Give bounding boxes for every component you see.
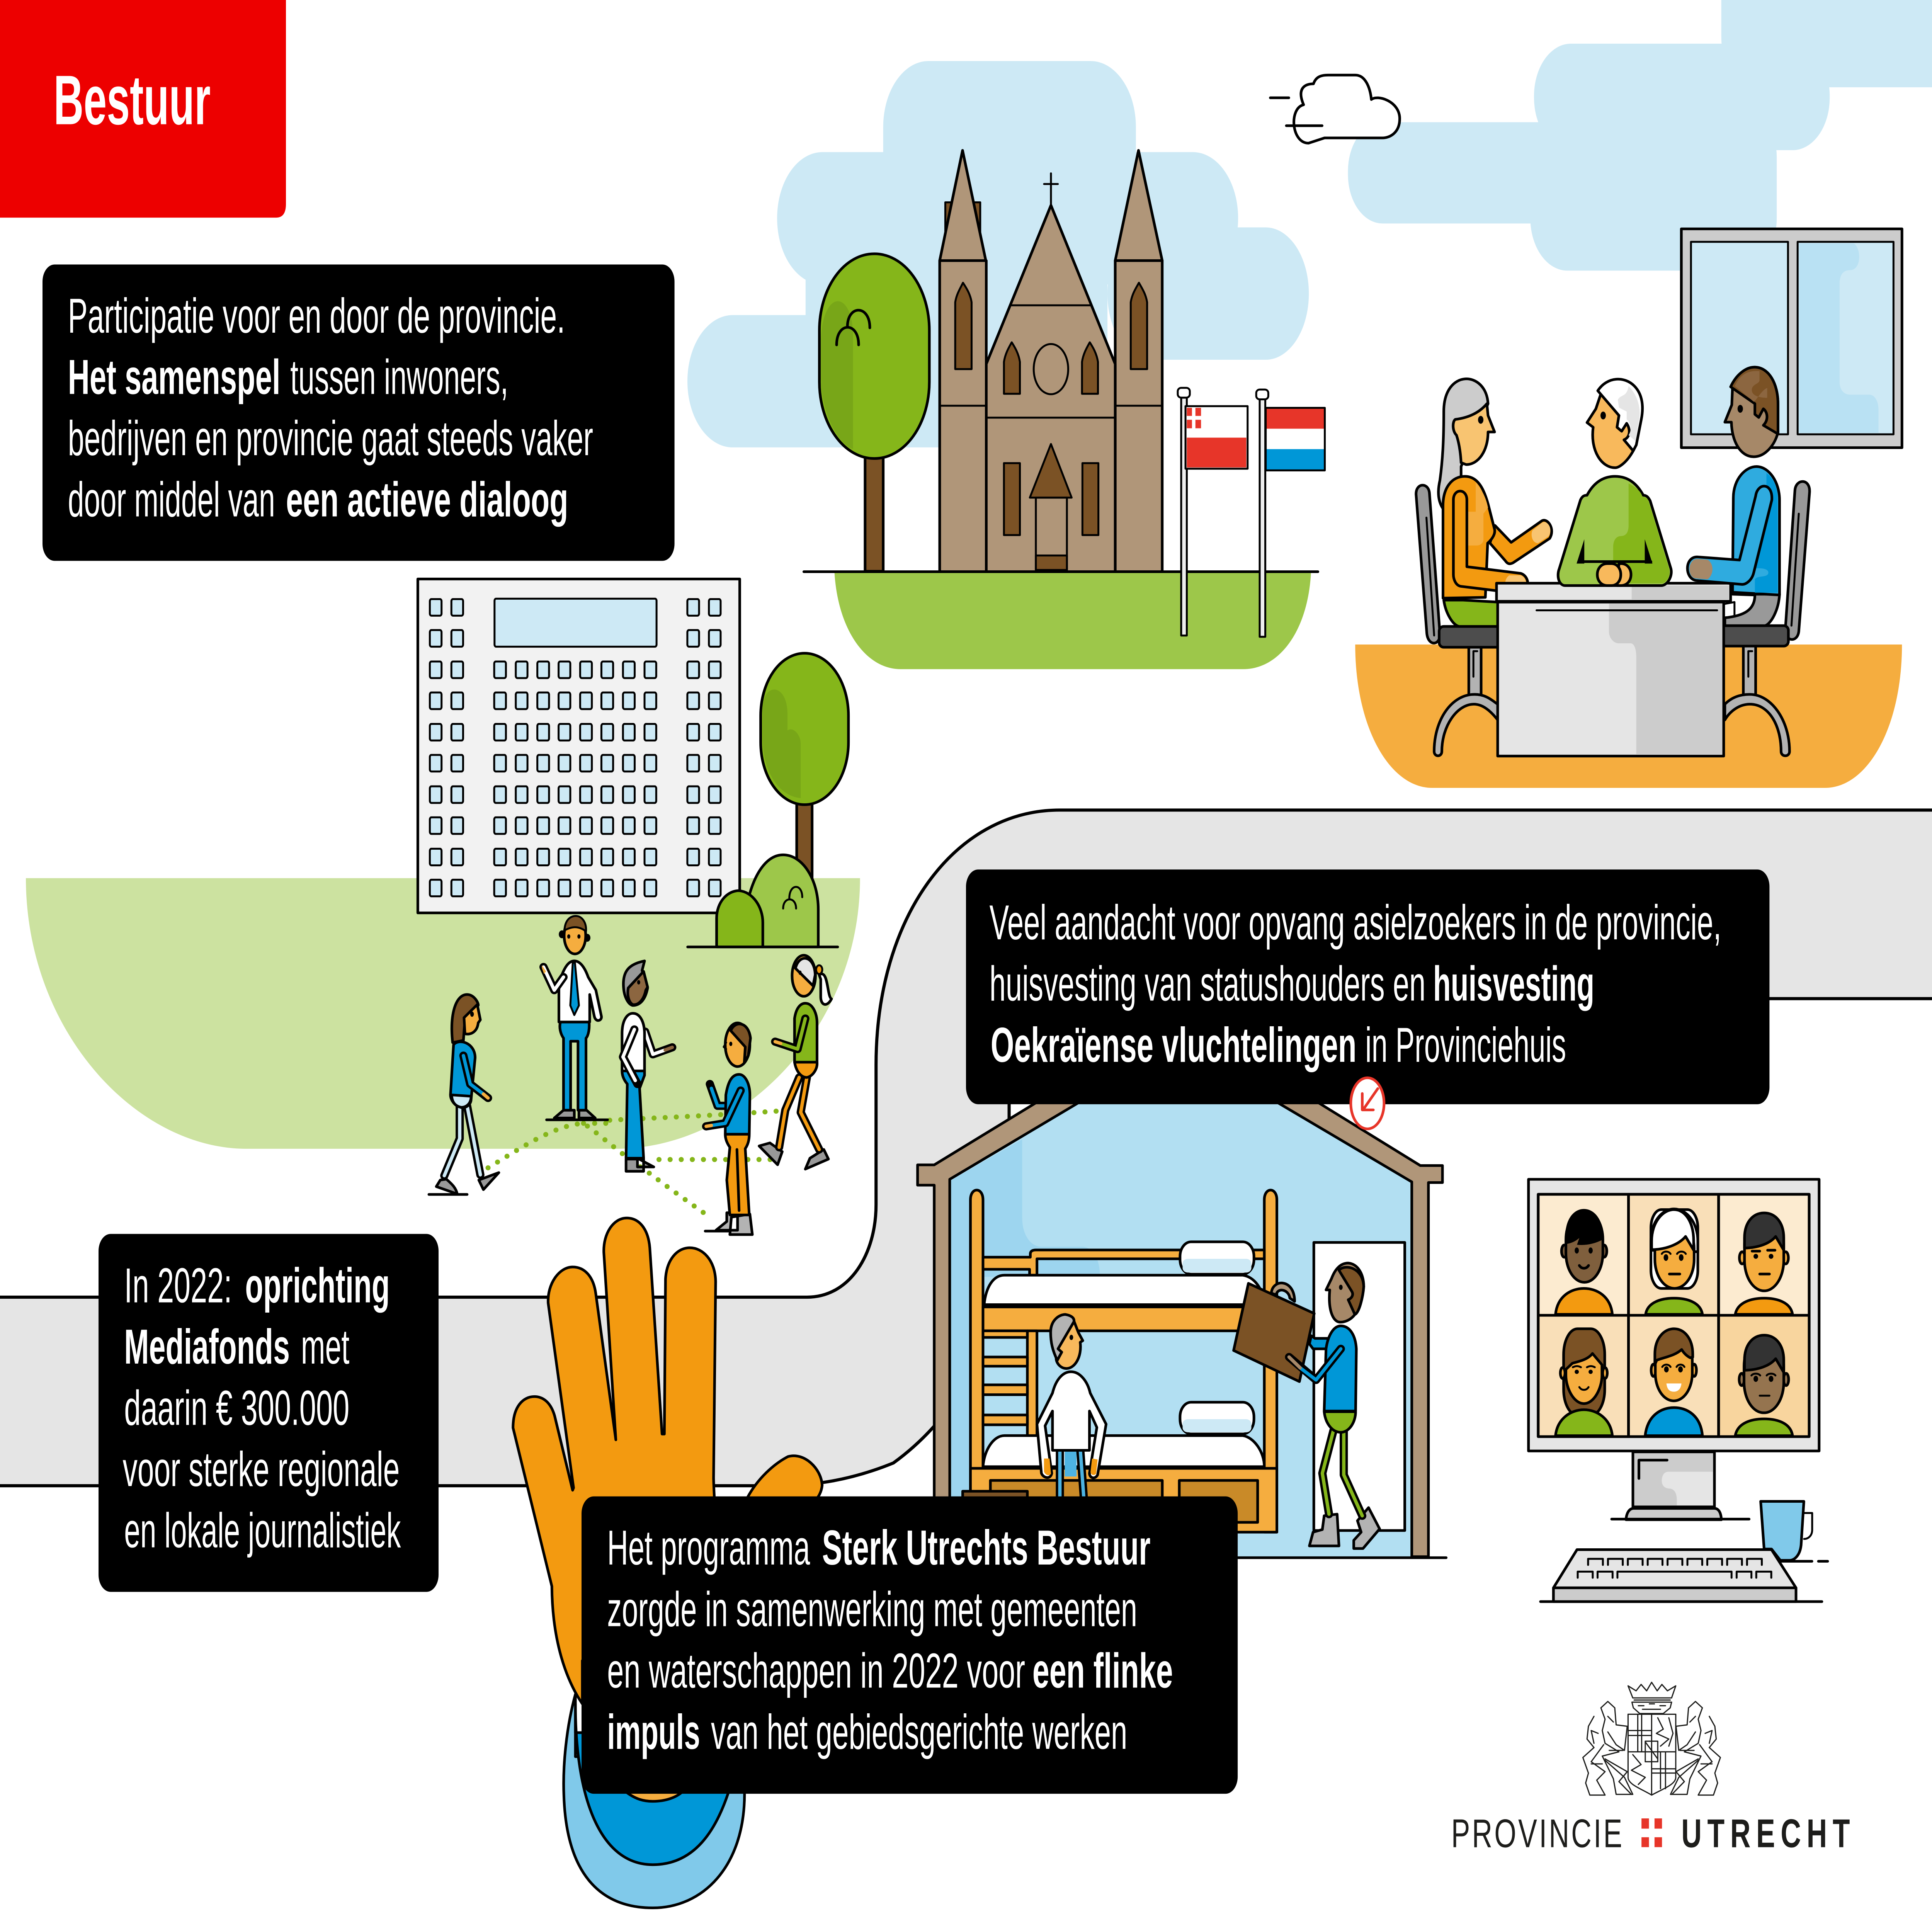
background clouds top right — [1348, 0, 1932, 270]
door — [1314, 1242, 1405, 1531]
person: man with white hair — [1558, 379, 1671, 585]
bushes — [688, 855, 838, 947]
text box: Sterk Utrechts Bestuur: impuls — [607, 1705, 700, 1760]
text box: mediafonds: met — [301, 1320, 349, 1374]
thumb — [748, 1456, 822, 1517]
text box: participatie: bedrijven en provincie gaat steeds vaker — [68, 411, 593, 466]
sleeve — [564, 1694, 745, 1908]
scene: bunk bed house for refugees — [918, 1102, 1446, 1558]
cuff — [575, 1704, 728, 1865]
text box: asielzoekers: Veel aandacht voor opvang asielzoekers in de provincie, — [990, 895, 1721, 950]
participant 6 — [1735, 1335, 1793, 1436]
title: Bestuur — [54, 61, 211, 139]
call participants — [1538, 1194, 1809, 1437]
scene: meeting at table — [1355, 229, 1902, 788]
tree behind bushes — [761, 653, 849, 879]
green ground under church — [835, 573, 1311, 669]
text box: Sterk Utrechts Bestuur: van het gebiedsgerichte werken — [711, 1705, 1128, 1760]
text box: asielzoekers — [966, 869, 1769, 1104]
scene: video call computer — [1529, 1179, 1828, 1602]
person: man with brown hair — [1687, 367, 1779, 626]
ground line — [804, 570, 1318, 573]
text box: Sterk Utrechts Bestuur: Sterk Utrechts Bestuur — [822, 1520, 1150, 1575]
text box: mediafonds: daarin € 300.000 — [124, 1381, 349, 1435]
dotted connection lines — [488, 1111, 777, 1217]
person: resident in white — [1037, 1315, 1106, 1499]
icon: mug — [1761, 1502, 1828, 1561]
monitor — [1529, 1179, 1819, 1451]
person: woman with ponytail — [759, 955, 832, 1169]
text box: participatie: een actieve dialoog — [286, 472, 568, 527]
orange ground — [1355, 645, 1902, 788]
keyboard — [1541, 1549, 1822, 1602]
person: man in blue and orange — [705, 1023, 752, 1235]
title tab — [0, 0, 286, 218]
person: woman with grey hair — [1439, 379, 1552, 626]
left chair — [1416, 485, 1501, 756]
house interior — [951, 1102, 1411, 1557]
table — [1497, 583, 1735, 756]
text box: participatie — [43, 265, 675, 561]
building — [418, 579, 740, 913]
scene: provincial office building with people — [418, 579, 849, 1235]
text box: mediafonds: In 2022: — [124, 1258, 232, 1313]
scene: church with tree and flags — [687, 61, 1325, 669]
text box: mediafonds: Mediafonds — [124, 1320, 290, 1374]
person: woman walking — [429, 995, 499, 1194]
participant 3 — [1735, 1213, 1793, 1315]
text box: participatie: Het samenspel — [68, 350, 281, 405]
person: man with grey hair — [622, 961, 672, 1171]
text box: participatie: Participatie voor en door de provincie. — [68, 288, 565, 344]
text box: mediafonds: voor sterke regionale — [122, 1442, 400, 1497]
text box: asielzoekers: huisvesting van statushouders en — [990, 956, 1425, 1011]
logo red squares — [1641, 1818, 1662, 1847]
right chair — [1721, 481, 1810, 756]
text box: asielzoekers: huisvesting — [1433, 956, 1594, 1011]
participant 4 — [1556, 1329, 1612, 1436]
monitor stand — [1612, 1452, 1749, 1520]
tree — [820, 254, 929, 571]
text box: participatie: tussen inwoners, — [290, 350, 509, 405]
church building — [940, 150, 1162, 572]
icon: small cloud outline — [1270, 75, 1400, 143]
flag of the Netherlands — [1256, 389, 1325, 637]
church clouds — [687, 61, 1309, 447]
text box: Sterk Utrechts Bestuur: zorgde in samenwerking met gemeenten — [607, 1582, 1137, 1637]
text box: participatie: door middel van — [68, 472, 275, 527]
text box: Sterk Utrechts Bestuur: een flinke — [1032, 1643, 1173, 1698]
light green ground left — [26, 878, 860, 1149]
text box: Sterk Utrechts Bestuur — [582, 1497, 1238, 1794]
text box: Sterk Utrechts Bestuur: en waterschappen in 2022 voor — [607, 1643, 1025, 1698]
scene: raised hand — [513, 1218, 822, 1908]
person: man carrying box — [1234, 1263, 1379, 1549]
participant 1 — [1556, 1209, 1612, 1315]
hand — [513, 1218, 716, 1704]
text box: asielzoekers: in Provinciehuis — [1365, 1018, 1566, 1073]
text box: mediafonds: oprichting — [245, 1258, 390, 1313]
house frame — [918, 1102, 1446, 1558]
text box: mediafonds — [99, 1234, 439, 1592]
logo: Provincie Utrecht — [1451, 1682, 1850, 1856]
text box: Sterk Utrechts Bestuur: Het programma — [607, 1520, 810, 1575]
text box: mediafonds: en lokale journalistiek — [124, 1503, 401, 1558]
icon: red arrow circle — [1351, 1078, 1384, 1129]
participant 2 — [1646, 1209, 1702, 1315]
road — [0, 810, 1932, 1486]
flag of Utrecht — [1178, 388, 1248, 636]
wrist — [624, 1790, 684, 1801]
participant 5 — [1645, 1329, 1702, 1436]
person: man with tie — [542, 916, 607, 1120]
logo wordmark: PROVINCIE — [1451, 1811, 1622, 1856]
window — [1681, 229, 1902, 448]
coat of arms — [1583, 1682, 1720, 1795]
bunk bed — [963, 1190, 1277, 1532]
logo: Provincie Utrecht: UTRECHT — [1681, 1811, 1850, 1856]
text box: asielzoekers: Oekraïense vluchtelingen — [991, 1018, 1357, 1073]
